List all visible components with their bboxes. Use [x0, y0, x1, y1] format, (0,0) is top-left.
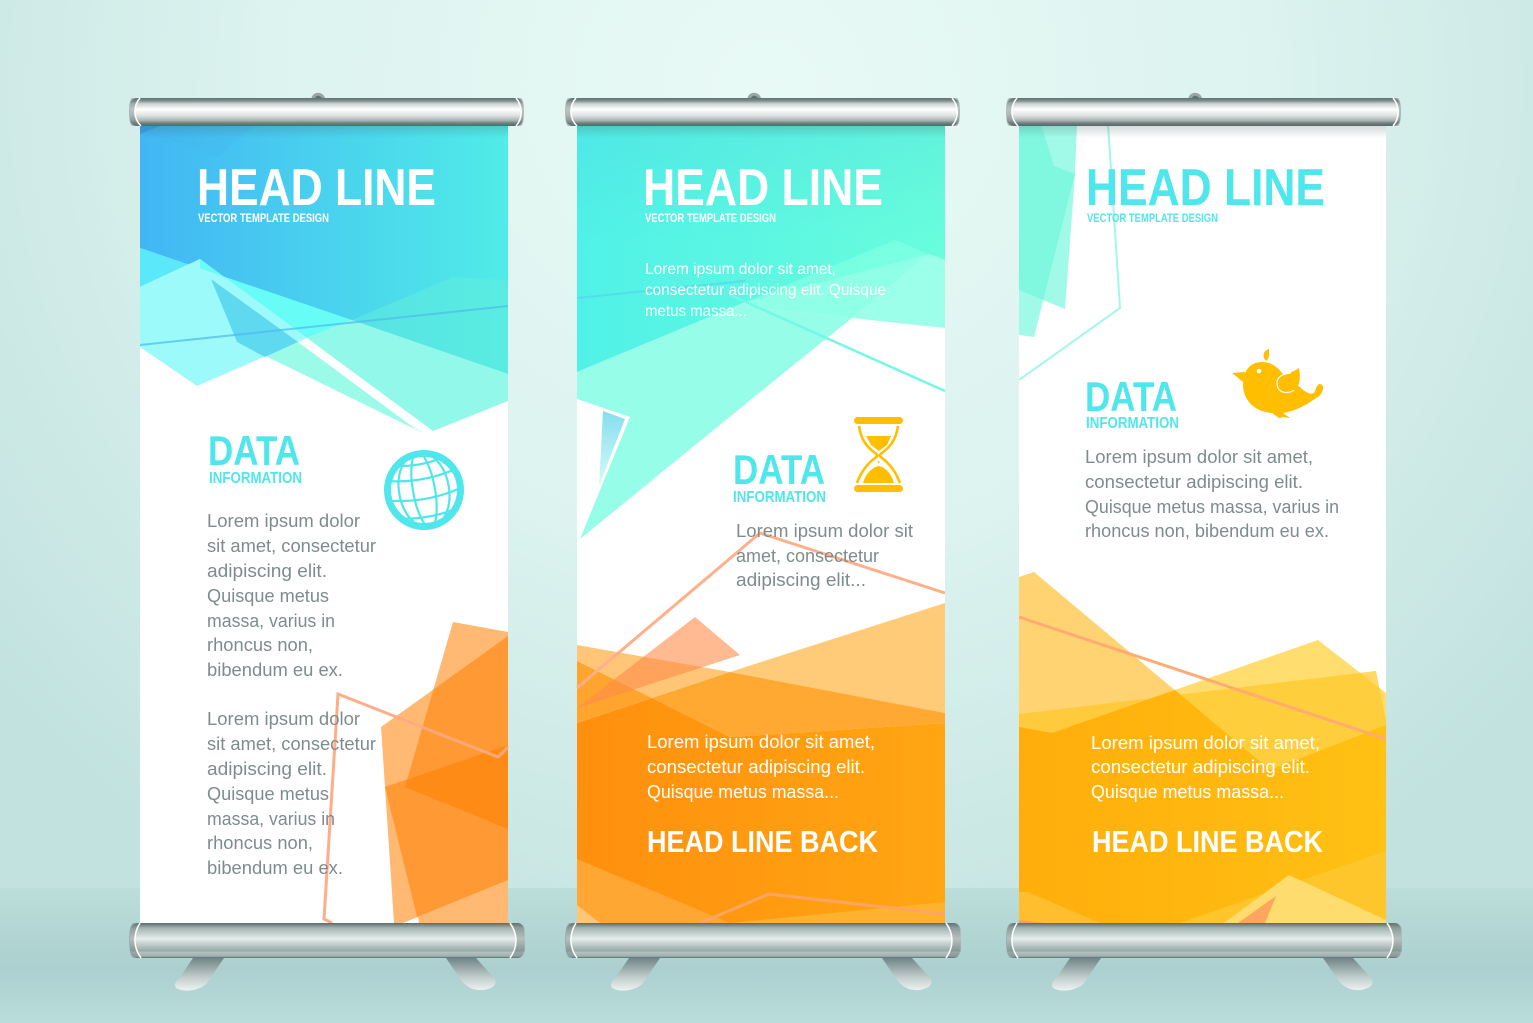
data heading	[733, 446, 826, 506]
bottom text	[1091, 732, 1320, 802]
title: HEAD LINE	[197, 159, 436, 217]
body text second paragraph	[207, 708, 376, 878]
roller shadow	[1019, 126, 1386, 138]
roller shadow	[140, 126, 508, 138]
bottom text: Lorem ipsum dolor sit amet,	[647, 731, 875, 752]
intro text	[645, 261, 886, 320]
body text: consectetur adipiscing elit.	[1085, 471, 1303, 492]
body text: Quisque metus massa, varius in	[1085, 496, 1339, 517]
yellow abstract shapes	[1019, 572, 1386, 923]
data heading: DATA	[1085, 373, 1177, 420]
mint abstract shapes	[1019, 124, 1120, 380]
body text: Lorem ipsum dolor	[207, 510, 360, 531]
body text second paragraph: massa, varius in	[207, 808, 335, 829]
panel: white and yellow banner	[1006, 93, 1402, 991]
body text: rhoncus non,	[207, 634, 313, 655]
data heading: INFORMATION	[733, 489, 826, 506]
body text: sit amet, consectetur	[207, 535, 376, 556]
intro text: consectetur adipiscing elit. Quisque	[645, 282, 886, 299]
back headline: HEAD LINE BACK	[1092, 824, 1324, 859]
icon: hourglass	[854, 417, 903, 492]
title: HEAD LINE	[1086, 159, 1325, 217]
title: HEAD LINE	[643, 159, 883, 217]
back headline: HEAD LINE BACK	[647, 824, 879, 859]
data heading: INFORMATION	[209, 470, 302, 487]
body text: Lorem ipsum dolor sit amet,	[1085, 446, 1313, 467]
icon: globe	[384, 450, 464, 530]
body text second paragraph: sit amet, consectetur	[207, 733, 376, 754]
body text: bibendum eu ex.	[207, 659, 343, 680]
stand hardware	[1006, 93, 1402, 991]
body text second paragraph: rhoncus non,	[207, 832, 313, 853]
data heading: DATA	[208, 427, 300, 474]
body text second paragraph: Lorem ipsum dolor	[207, 708, 360, 729]
orange abstract shapes	[577, 533, 945, 923]
body text: rhoncus non, bibendum eu ex.	[1085, 520, 1329, 541]
banner sheet	[140, 124, 508, 923]
body text: adipiscing elit...	[736, 569, 866, 590]
orange abstract shapes	[381, 622, 508, 923]
banner sheet	[577, 124, 945, 923]
body text: Lorem ipsum dolor sit	[736, 520, 913, 541]
body text	[736, 520, 913, 590]
bottom text	[647, 731, 875, 802]
body text second paragraph: adipiscing elit.	[207, 758, 327, 779]
orange outline line	[324, 694, 508, 923]
body text: massa, varius in	[207, 610, 335, 631]
body text: amet, consectetur	[736, 545, 879, 566]
blue abstract header shapes	[140, 124, 508, 436]
data heading: INFORMATION	[1086, 415, 1179, 432]
body text second paragraph: bibendum eu ex.	[207, 857, 343, 878]
body text second paragraph: Quisque metus	[207, 783, 329, 804]
bottom text: Lorem ipsum dolor sit amet,	[1091, 732, 1320, 753]
subtitle: VECTOR TEMPLATE DESIGN	[645, 211, 776, 225]
subtitle: VECTOR TEMPLATE DESIGN	[198, 211, 329, 225]
teal abstract header shapes	[577, 124, 945, 539]
stand hardware	[129, 93, 525, 991]
floor	[0, 888, 1533, 1023]
icon: bird	[1232, 349, 1323, 418]
data heading: DATA	[733, 446, 825, 493]
bottom text: Quisque metus massa...	[1091, 781, 1284, 802]
panel: blue banner	[129, 93, 525, 991]
intro text: metus massa...	[645, 303, 747, 320]
bottom text: consectetur adipiscing elit.	[647, 756, 865, 777]
body text	[1085, 446, 1339, 541]
panel: teal and orange banner	[565, 93, 961, 991]
data heading	[1085, 373, 1179, 432]
intro text: Lorem ipsum dolor sit amet,	[645, 261, 836, 278]
bottom text: Quisque metus massa...	[647, 781, 839, 802]
body text: adipiscing elit.	[207, 560, 327, 581]
bottom text: consectetur adipiscing elit.	[1091, 756, 1310, 777]
data heading	[208, 427, 302, 487]
roller shadow	[577, 126, 945, 138]
body text	[207, 510, 376, 680]
stand hardware	[565, 93, 961, 991]
body text: Quisque metus	[207, 585, 329, 606]
banner sheet	[1019, 124, 1386, 923]
subtitle: VECTOR TEMPLATE DESIGN	[1087, 211, 1218, 225]
